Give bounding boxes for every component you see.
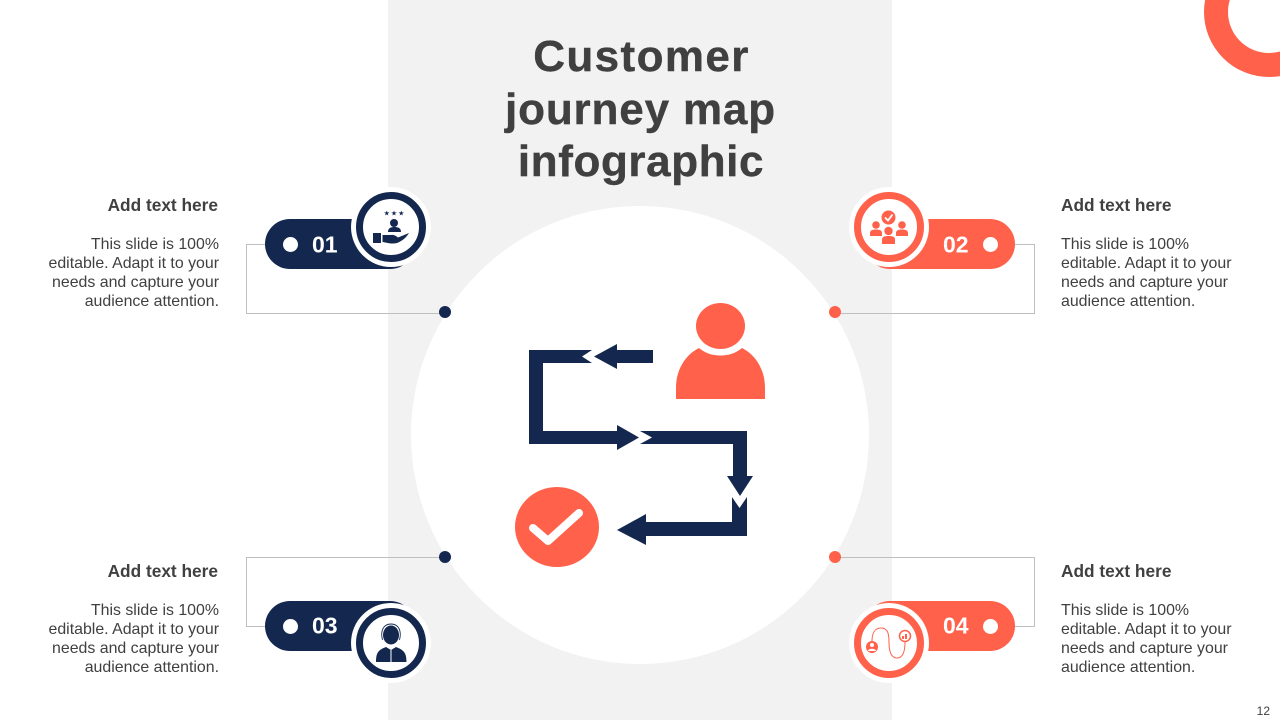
number 04: 04 xyxy=(943,612,969,638)
text block: step 04: audience attention. xyxy=(1061,659,1195,676)
text block: step 01: audience attention. xyxy=(85,293,219,310)
text block: step 03: This slide is 100% xyxy=(91,602,219,619)
icon: support agent with headset xyxy=(376,624,406,662)
step 01 connector xyxy=(246,244,451,318)
step 02 connector xyxy=(829,244,1034,318)
step 01 badge xyxy=(265,187,431,269)
icon: hand holding rated customer: ★★★ xyxy=(384,210,405,218)
number 02: 02 xyxy=(943,232,969,258)
step 03 connector xyxy=(246,551,451,626)
text block: step 03: Add text here xyxy=(108,561,218,581)
icon: hand holding rated customer xyxy=(373,210,409,244)
text block: step 01: This slide is 100% xyxy=(91,236,219,253)
text block: step 02 xyxy=(1061,195,1232,310)
title: infographic xyxy=(518,137,764,186)
decorative corner ring xyxy=(1216,0,1280,65)
number 01: 01 xyxy=(312,232,338,258)
central journey diagram xyxy=(515,303,765,567)
text block: step 04: Add text here xyxy=(1061,561,1172,581)
text block: step 02: needs and capture your xyxy=(1061,274,1229,291)
step 02 badge xyxy=(849,187,1015,269)
text block: step 04: editable. Adapt it to your xyxy=(1061,621,1232,638)
text block: step 01 xyxy=(48,195,220,310)
text block: step 03 xyxy=(48,561,220,676)
icon: customer group with check xyxy=(870,210,908,244)
text block: step 03: editable. Adapt it to your xyxy=(48,621,220,638)
text block: step 04: This slide is 100% xyxy=(1061,602,1189,619)
icon: customer person xyxy=(676,303,765,399)
text block: step 01: Add text here xyxy=(108,195,218,215)
text block: step 01: editable. Adapt it to your xyxy=(48,255,220,272)
text block: step 03: needs and capture your xyxy=(52,640,220,657)
step 03 badge xyxy=(265,601,431,683)
step 04 badge xyxy=(849,601,1015,683)
text block: step 02: audience attention. xyxy=(1061,293,1195,310)
text block: step 01: needs and capture your xyxy=(52,274,220,291)
icon: check mark badge xyxy=(515,487,599,567)
page number: 12 xyxy=(1257,704,1270,718)
central white circle xyxy=(411,206,869,664)
text block: step 04 xyxy=(1061,561,1232,676)
icon: journey path between customer and chart xyxy=(866,628,910,658)
title: Customer xyxy=(533,32,750,81)
arrow path: journey route xyxy=(529,344,753,545)
title: journey map xyxy=(504,85,776,134)
text block: step 02: This slide is 100% xyxy=(1061,236,1189,253)
text block: step 02: editable. Adapt it to your xyxy=(1061,255,1232,272)
text block: step 04: needs and capture your xyxy=(1061,640,1229,657)
text block: step 03: audience attention. xyxy=(85,659,219,676)
step 04 connector xyxy=(829,551,1034,626)
text block: step 02: Add text here xyxy=(1061,195,1172,215)
number 03: 03 xyxy=(312,612,338,638)
